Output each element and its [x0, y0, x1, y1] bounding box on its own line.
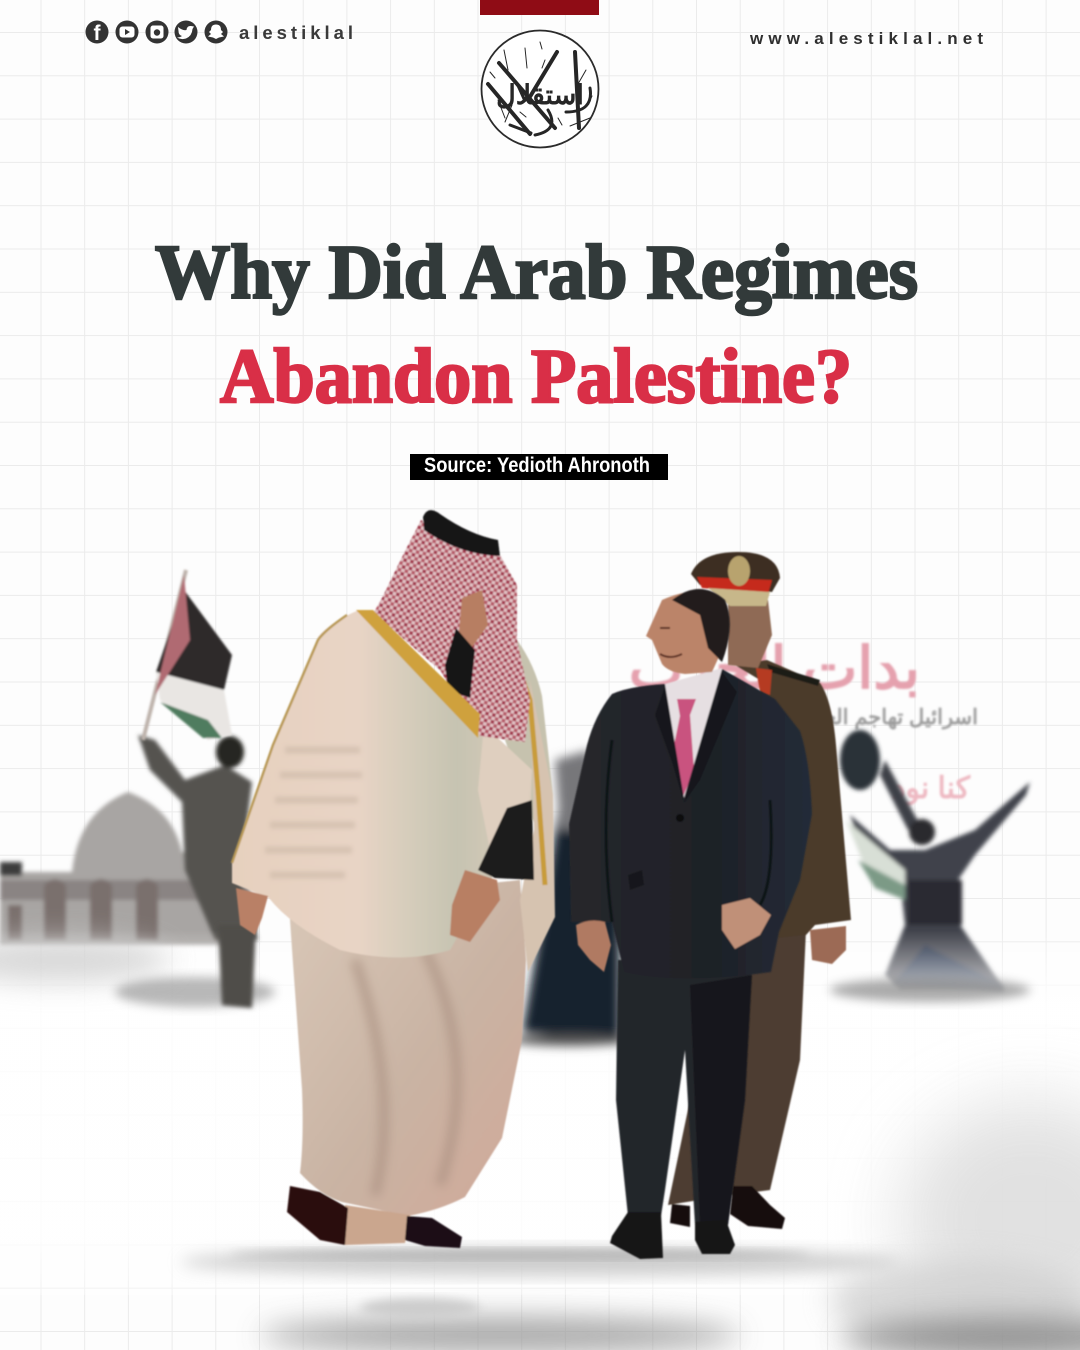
white fog over the lower background [0, 930, 1080, 1295]
title line 2: Abandon Palestine? [220, 333, 852, 419]
title line 1: Why Did Arab Regimes [155, 229, 918, 315]
right robe panel [520, 680, 555, 972]
figure: general in uniform [668, 552, 851, 1229]
mosque [0, 792, 250, 945]
soldier legs and shadow above the fog [115, 925, 275, 1008]
left shoe [287, 1186, 348, 1245]
social icons [86, 20, 228, 45]
trousers [616, 960, 752, 1225]
icon: facebook: f [94, 22, 102, 45]
logo: circular calligraphy seal [482, 30, 598, 148]
icon: snapchat [204, 20, 228, 44]
shoes [730, 1186, 785, 1229]
right shoe [695, 1220, 735, 1254]
pink lower line: كنا نود [892, 772, 971, 806]
robe [232, 610, 532, 958]
face [458, 590, 488, 650]
figure: man in dark suit [569, 589, 812, 1259]
figure: man in white robe and red headdress [232, 510, 555, 1248]
source label: Source: Yedioth Ahronoth [424, 454, 650, 477]
soldier silhouette [138, 735, 258, 940]
trousers [668, 930, 806, 1205]
dark sleeve [478, 800, 534, 880]
title [155, 229, 918, 419]
headdress [374, 510, 530, 742]
ground shadow under protester [830, 978, 1030, 1002]
exposed foot [345, 1205, 410, 1245]
hand [810, 926, 846, 964]
beard [445, 628, 475, 698]
faint printed text texture [265, 750, 362, 875]
header: red top bar [480, 0, 599, 15]
thobe [289, 880, 526, 1216]
icon: instagram [146, 20, 168, 44]
smoke haze [260, 1100, 1080, 1350]
left hand [576, 921, 611, 972]
black agal [423, 510, 500, 556]
jacket [569, 669, 812, 978]
background scene: kneeling protester [840, 730, 1030, 992]
ground shadow under the figures [180, 1248, 900, 1276]
background scene: Arabic newspaper text [629, 636, 978, 806]
icon: facebook [86, 20, 108, 45]
right shoe [405, 1216, 462, 1248]
background scene: dark car behind the figures [510, 750, 630, 1046]
shirt and tie [665, 668, 722, 800]
icon: twitter [174, 20, 198, 44]
hand at waist [450, 870, 500, 942]
robe gold edging on left [232, 615, 347, 863]
grey subheadline: اسرائيل تهاجم العدو اليوم [757, 706, 978, 730]
right gold trim [514, 655, 545, 885]
right hand [722, 898, 771, 949]
website address: www.alestiklal.net [749, 29, 983, 48]
grey haze at the foot of the mosque [0, 938, 170, 982]
face [728, 600, 772, 668]
pink headline: بدات الحرب [629, 636, 920, 704]
head [646, 589, 730, 674]
icon: youtube [116, 20, 138, 44]
background scene: mosque, soldier and flag [0, 570, 258, 945]
left shoe [610, 1212, 663, 1259]
brand handle: alestiklal [239, 22, 353, 43]
jacket [735, 660, 851, 940]
Palestinian flag [143, 570, 232, 740]
headdress back drape [505, 640, 553, 840]
left hand [236, 888, 268, 935]
logo: circular calligraphy seal: استقلال [496, 80, 584, 110]
gold collar trim [356, 610, 480, 738]
peaked cap [691, 552, 780, 606]
